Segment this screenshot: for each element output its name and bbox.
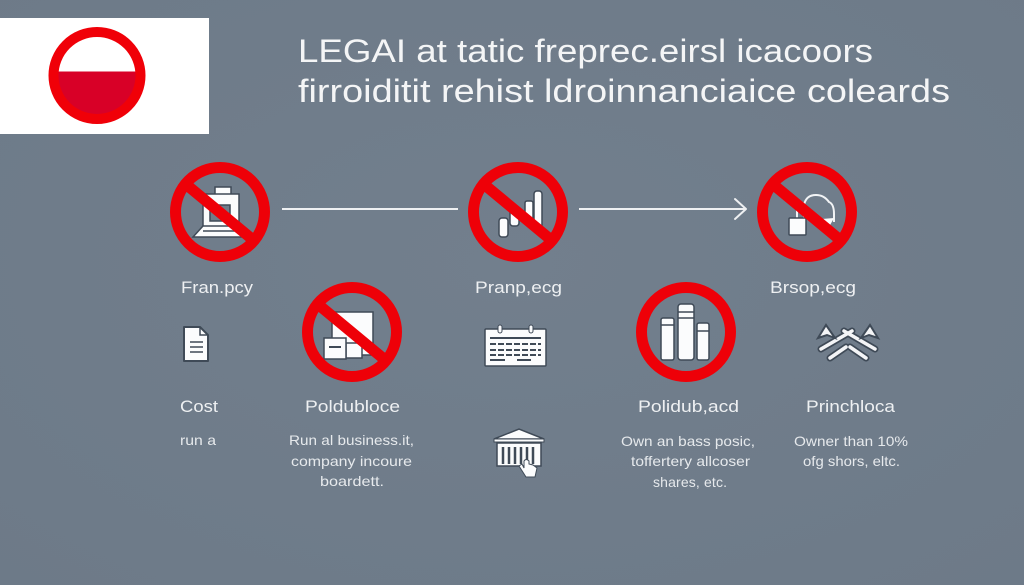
text block: Run al business: Run al business.it, [289, 432, 414, 448]
title: LEGAI at tatic freprec.eirsl icacoors [298, 33, 873, 69]
icon: crossed tools [818, 325, 878, 358]
text block: Own an bass: Own an bass posic, [621, 433, 755, 449]
text block: Run al business [289, 432, 414, 489]
prohibited icon: padlock [762, 168, 852, 256]
text block: Own an bass: toffertery allcoser [631, 453, 750, 469]
text: run a: run a [180, 432, 216, 448]
label: Fran.pcy: Fran.pcy [181, 278, 254, 297]
label: Polidub,acd: Polidub,acd [638, 397, 739, 416]
text block: Own an bass [621, 433, 755, 490]
label: Princhloca: Princhloca [806, 397, 896, 416]
red ring icon: columns [642, 288, 730, 376]
title: firroiditit rehist ldroinnanciaice coleards [298, 73, 950, 109]
connector line 1 [282, 208, 458, 210]
text block: Owner than 10% [794, 433, 908, 469]
icon: document [184, 327, 208, 361]
text block: Owner than 10%: Owner than 10% [794, 433, 908, 449]
label: Cost: Cost [180, 397, 218, 416]
icon: bank building with pointer hand [494, 429, 544, 477]
text block: Run al business: company incoure [291, 453, 412, 469]
text block: Run al business: boardett. [320, 473, 384, 489]
prohibited icon: laptop and documents [176, 168, 264, 256]
flag panel with half-filled red circle [0, 18, 209, 134]
text block: Own an bass: shares, etc. [653, 474, 727, 490]
prohibited icon: stacked documents [308, 288, 396, 376]
text block: Owner than 10%: ofg shors, eltc. [803, 453, 900, 469]
label: Pranp,ecg: Pranp,ecg [475, 278, 562, 297]
label: Poldubloce: Poldubloce [305, 397, 400, 416]
arrow connector 2 [579, 199, 746, 219]
title [298, 33, 950, 109]
prohibited icon: bar chart [474, 168, 562, 256]
label: Brsop,ecg: Brsop,ecg [770, 278, 856, 297]
icon: calendar [485, 325, 546, 366]
